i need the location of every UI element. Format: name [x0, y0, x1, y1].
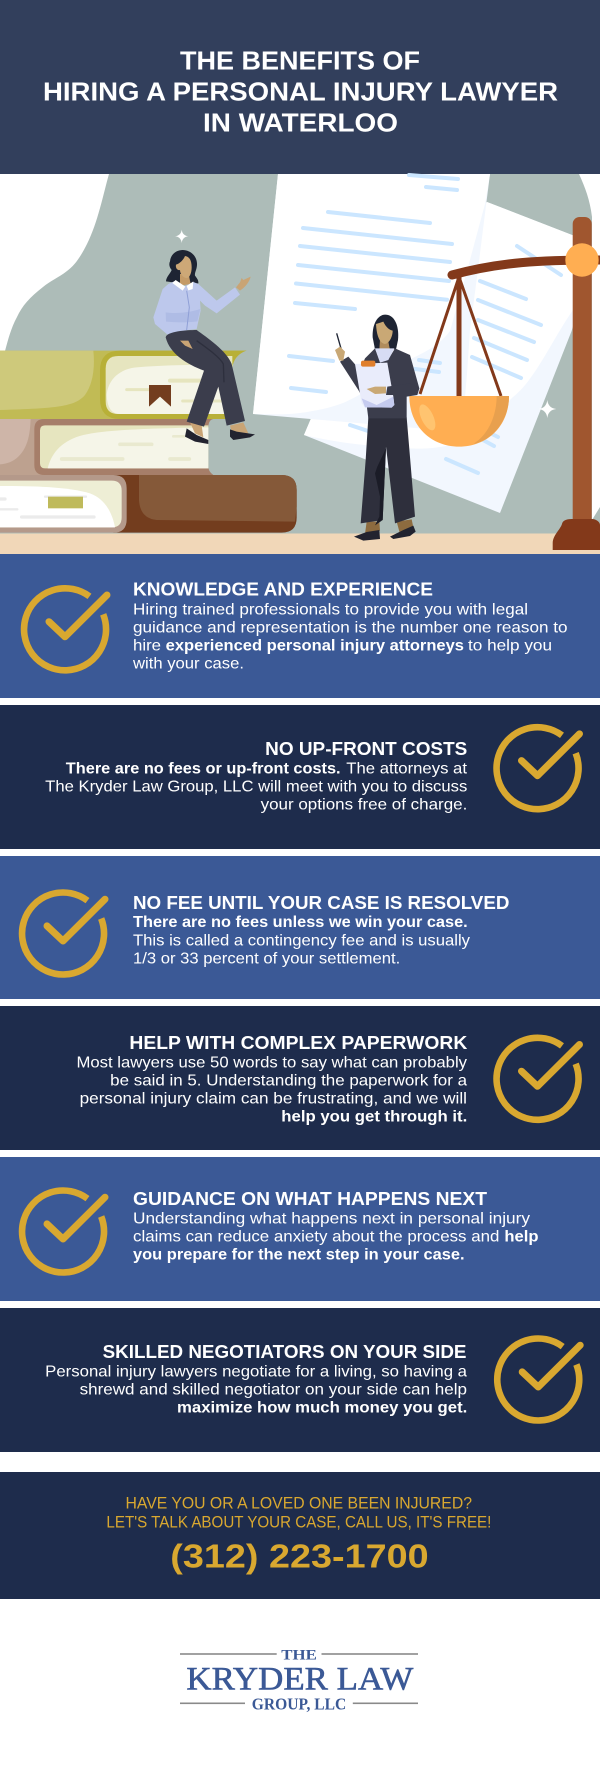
- body text: There are no fees or up-front costs.: [66, 760, 341, 777]
- illustration: lawyers, books and scale: [0, 174, 600, 554]
- call to action text: LET'S TALK ABOUT YOUR CASE, CALL US, IT'S FREE!: [106, 1513, 491, 1531]
- body text: hire: [133, 637, 161, 654]
- body text: you prepare for the next step in your case.: [133, 1246, 465, 1263]
- panel: no up-front costs: [0, 705, 600, 849]
- chains: [420, 277, 501, 396]
- body text: This is called a contingency fee and is usually: [133, 932, 470, 949]
- background blob: [0, 174, 600, 534]
- shoes: [354, 526, 416, 541]
- body text: [45, 760, 468, 813]
- standing lawyer: [335, 315, 419, 541]
- logo: THE: [281, 1648, 317, 1664]
- body text: [45, 1364, 467, 1417]
- jacket: [340, 348, 419, 418]
- clipboard: [355, 363, 394, 408]
- ground: [0, 534, 600, 554]
- body text: guidance and representation is the number one reason to: [133, 619, 568, 636]
- header panel with title: HIRING A PERSONAL INJURY LAWYER: [43, 77, 558, 107]
- panel: guidance on what happens next: [0, 1157, 600, 1301]
- body text: [132, 601, 568, 672]
- body text: 1/3 or 33 percent of your settlement.: [133, 950, 400, 967]
- sparkle: [538, 400, 556, 418]
- header panel with title: THE BENEFITS OF: [180, 46, 420, 76]
- panel: help with complex paperwork: [0, 1006, 600, 1150]
- body text: Most lawyers use 50 words to say what can probably: [76, 1055, 467, 1072]
- trousers: [166, 330, 245, 427]
- beam: [452, 260, 600, 275]
- body text: [133, 1210, 539, 1263]
- shoes: [185, 428, 255, 444]
- body text: help: [504, 1228, 539, 1245]
- header panel with title: IN WATERLOO: [203, 107, 398, 137]
- icon: gold check: [22, 1191, 105, 1273]
- middle book: [0, 419, 213, 475]
- body text: help you get through it.: [281, 1108, 467, 1125]
- heading: SKILLED NEGOTIATORS ON YOUR SIDE: [103, 1342, 466, 1362]
- phone number: (312) 223-1700: [170, 1537, 429, 1574]
- icon: gold check: [497, 727, 580, 809]
- icon: gold check: [497, 1339, 580, 1421]
- panel: knowledge and experience: [0, 554, 600, 698]
- icon: gold check: [497, 1038, 580, 1120]
- pen: [337, 333, 343, 357]
- body text: Hiring trained professionals to provide you with legal: [133, 601, 528, 618]
- body text: to help you: [468, 637, 552, 654]
- seated woman: [153, 250, 255, 444]
- body text: Understanding what happens next in personal injury: [133, 1210, 530, 1227]
- body text: claims can reduce anxiety about the process and: [133, 1228, 499, 1245]
- logo: [180, 1648, 418, 1713]
- heading: NO UP-FRONT COSTS: [265, 739, 467, 759]
- top book: [0, 351, 247, 419]
- bookmark: [149, 385, 171, 407]
- panel: no fee until resolved: [0, 856, 600, 999]
- scale: [409, 217, 600, 550]
- panel: skilled negotiators: [0, 1308, 600, 1452]
- header panel with title: [0, 0, 600, 174]
- body text: personal injury claim can be frustrating, and we will: [80, 1090, 467, 1107]
- call to action panel: [0, 1472, 600, 1599]
- stack of books: [0, 351, 297, 533]
- body text: your options free of charge.: [261, 796, 467, 813]
- document sheet, back: [304, 202, 590, 513]
- post: [573, 217, 592, 537]
- body text: Personal injury lawyers negotiate for a living, so having a: [45, 1364, 467, 1381]
- sparkle: [175, 230, 188, 243]
- body text: experienced personal injury attorneys: [166, 637, 464, 654]
- icon: gold check: [22, 893, 105, 975]
- body text: [133, 914, 470, 967]
- body text: maximize how much money you get.: [177, 1400, 467, 1417]
- body text: The attorneys at: [346, 760, 468, 777]
- icon: gold check: [24, 588, 107, 670]
- bowl: [409, 396, 509, 447]
- logo: KRYDER LAW: [186, 1661, 414, 1697]
- body text: The Kryder Law Group, LLC will meet with you to discuss: [45, 778, 467, 795]
- body text: shrewd and skilled negotiator on your side can help: [80, 1382, 467, 1399]
- body text: There are no fees unless we win your case.: [133, 914, 468, 931]
- trousers: [361, 417, 415, 523]
- document sheet, front: [253, 174, 490, 432]
- ankles: [365, 519, 413, 534]
- body text: be said in 5. Understanding the paperwork for a: [110, 1072, 467, 1089]
- pivot: [565, 243, 599, 277]
- heading: KNOWLEDGE AND EXPERIENCE: [133, 580, 433, 600]
- heading: NO FEE UNTIL YOUR CASE IS RESOLVED: [133, 893, 509, 913]
- body text: with your case.: [132, 655, 244, 672]
- bottom book: [0, 475, 297, 533]
- call to action text: [106, 1495, 491, 1531]
- call to action text: HAVE YOU OR A LOVED ONE BEEN INJURED?: [126, 1495, 472, 1513]
- heading: HELP WITH COMPLEX PAPERWORK: [129, 1033, 467, 1053]
- heading: GUIDANCE ON WHAT HAPPENS NEXT: [133, 1189, 487, 1209]
- blouse: [153, 281, 240, 345]
- logo: GROUP, LLC: [252, 1694, 346, 1713]
- ankles: [190, 422, 248, 437]
- body text: [76, 1055, 467, 1125]
